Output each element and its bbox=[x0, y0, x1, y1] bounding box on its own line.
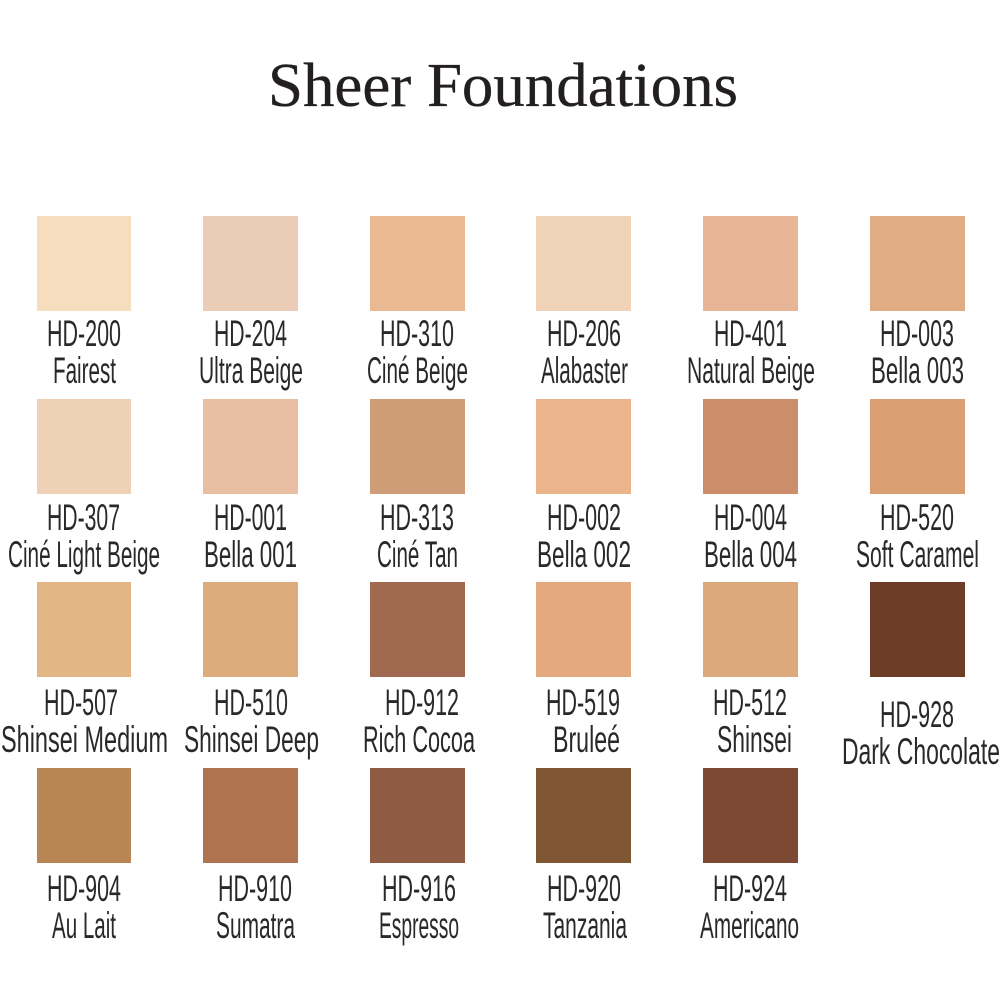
swatch: HD-920 Tanzania: HD-920 bbox=[547, 867, 621, 909]
swatch: HD-924 Americano: HD-924 bbox=[713, 867, 787, 909]
swatch: HD-206 Alabaster: Alabaster bbox=[541, 349, 628, 391]
swatch: HD-912 Rich Cocoa: HD-912 bbox=[385, 681, 459, 723]
swatch: HD-924 Americano bbox=[700, 768, 799, 946]
swatch: HD-904 Au Lait: HD-904 bbox=[47, 867, 121, 909]
swatch: HD-507 Shinsei Medium: Shinsei Medium bbox=[1, 718, 168, 760]
swatch: HD-003 Bella 003 bbox=[870, 216, 965, 391]
swatch: HD-510 Shinsei Deep: HD-510 bbox=[214, 681, 288, 723]
swatch: HD-004 Bella 004 bbox=[703, 399, 798, 575]
swatch: HD-910 Sumatra: HD-910 bbox=[218, 867, 292, 909]
swatch: HD-200 Fairest: Fairest bbox=[53, 349, 116, 391]
swatch: HD-910 Sumatra bbox=[203, 768, 298, 946]
swatch: HD-204 Ultra Beige: Ultra Beige bbox=[199, 349, 303, 391]
swatch: HD-401 Natural Beige: Natural Beige bbox=[687, 349, 815, 391]
swatch: HD-916 Espresso: HD-916 bbox=[382, 867, 456, 909]
swatch: HD-307 Ciné Light Beige: Ciné Light Beige bbox=[8, 533, 160, 575]
swatch: HD-401 Natural Beige bbox=[687, 216, 815, 391]
swatch: HD-001 Bella 001: HD-001 bbox=[214, 496, 287, 538]
swatch: HD-204 Ultra Beige: HD-204 bbox=[214, 312, 287, 354]
swatch: HD-910 Sumatra: Sumatra bbox=[216, 904, 295, 946]
swatch: HD-206 Alabaster: HD-206 bbox=[547, 312, 621, 354]
swatch: HD-310 Ciné Beige: HD-310 bbox=[380, 312, 454, 354]
swatch: HD-313 Ciné Tan: HD-313 bbox=[380, 496, 454, 538]
swatch: HD-904 Au Lait: Au Lait bbox=[52, 904, 116, 946]
swatch: HD-310 Ciné Beige bbox=[367, 216, 468, 391]
swatch: HD-307 Ciné Light Beige bbox=[8, 399, 160, 575]
swatch: HD-928 Dark Chocolate bbox=[842, 582, 1000, 772]
swatch: HD-520 Soft Caramel bbox=[856, 399, 979, 575]
swatch: HD-916 Espresso: Espresso bbox=[379, 904, 459, 946]
swatch: HD-904 Au Lait bbox=[37, 768, 131, 946]
swatch: HD-200 Fairest: HD-200 bbox=[47, 312, 121, 354]
swatch: HD-200 Fairest bbox=[37, 216, 131, 391]
swatch: HD-004 Bella 004: Bella 004 bbox=[704, 533, 797, 575]
swatch: HD-510 Shinsei Deep: Shinsei Deep bbox=[184, 718, 319, 760]
swatch: HD-920 Tanzania bbox=[536, 768, 631, 946]
title: Sheer Foundations bbox=[268, 52, 738, 120]
swatch: HD-004 Bella 004: HD-004 bbox=[714, 496, 787, 538]
swatch: HD-204 Ultra Beige bbox=[199, 216, 303, 391]
swatch: HD-002 Bella 002: Bella 002 bbox=[537, 533, 631, 575]
swatch: HD-519 Bruleé: Bruleé bbox=[553, 718, 620, 760]
swatch: HD-507 Shinsei Medium: HD-507 bbox=[44, 681, 118, 723]
swatch: HD-519 Bruleé bbox=[536, 582, 631, 760]
swatch: HD-510 Shinsei Deep bbox=[184, 582, 319, 760]
swatch: HD-507 Shinsei Medium bbox=[1, 582, 168, 760]
swatch: HD-001 Bella 001: Bella 001 bbox=[204, 533, 297, 575]
swatch: HD-001 Bella 001 bbox=[203, 399, 298, 575]
swatch: HD-512 Shinsei bbox=[703, 582, 798, 760]
swatch: HD-512 Shinsei: HD-512 bbox=[713, 681, 787, 723]
swatch: HD-313 Ciné Tan: Ciné Tan bbox=[377, 533, 458, 575]
swatch: HD-401 Natural Beige: HD-401 bbox=[714, 312, 787, 354]
swatch: HD-519 Bruleé: HD-519 bbox=[546, 681, 620, 723]
swatch: HD-310 Ciné Beige: Ciné Beige bbox=[367, 349, 468, 391]
swatch: HD-313 Ciné Tan bbox=[370, 399, 465, 575]
swatch: HD-206 Alabaster bbox=[536, 216, 631, 391]
swatch: HD-916 Espresso bbox=[370, 768, 465, 946]
swatch: HD-002 Bella 002: HD-002 bbox=[547, 496, 621, 538]
swatch: HD-924 Americano: Americano bbox=[700, 904, 799, 946]
swatch: HD-307 Ciné Light Beige: HD-307 bbox=[47, 496, 120, 538]
swatch: HD-512 Shinsei: Shinsei bbox=[717, 718, 792, 760]
swatch: HD-912 Rich Cocoa bbox=[363, 582, 475, 760]
swatch: HD-920 Tanzania: Tanzania bbox=[543, 904, 627, 946]
swatch: HD-002 Bella 002 bbox=[536, 399, 631, 575]
swatch: HD-912 Rich Cocoa: Rich Cocoa bbox=[363, 718, 475, 760]
